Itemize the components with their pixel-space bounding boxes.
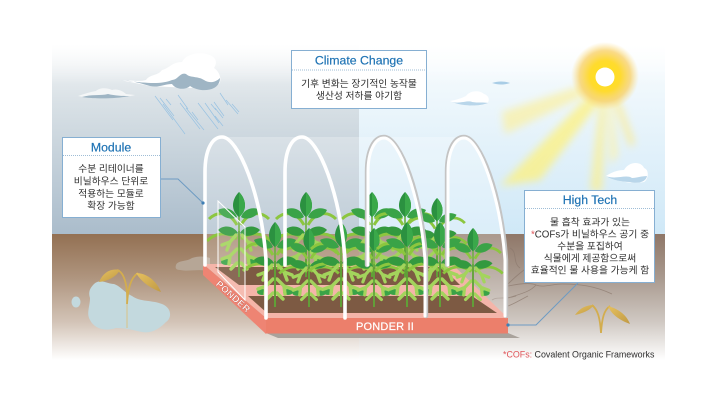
- wilted plant right: [575, 305, 630, 333]
- soil: back bed: [215, 267, 460, 285]
- label: PONDER II: PONDER II: [356, 321, 414, 333]
- main cloud: [120, 53, 220, 88]
- body: 비닐하우스 단위로: [74, 174, 148, 188]
- heading: High Tech: [563, 193, 617, 207]
- body: 확장 가능함: [87, 200, 135, 212]
- body: 기후 변화는 장기적인 농작물: [301, 78, 417, 90]
- sky: sunny right: [359, 45, 665, 235]
- shadow: [266, 333, 520, 338]
- sun with rays: [500, 42, 639, 192]
- body: 물 흡착 효과가 있는: [550, 216, 630, 228]
- heading: Module: [91, 140, 131, 154]
- callout: Module: [62, 138, 160, 218]
- connector: Module: [161, 179, 205, 205]
- bed front: [266, 318, 508, 334]
- ground: right: [359, 234, 665, 360]
- film: [205, 137, 506, 316]
- body: 수분 리테이너를: [78, 163, 144, 175]
- dark cloud with rain: [78, 53, 239, 134]
- heading: Climate Change: [315, 54, 403, 68]
- connector: High Tech: [506, 283, 578, 327]
- callout: Climate Change: [292, 50, 426, 108]
- bed top: [203, 264, 508, 318]
- rain: [155, 93, 239, 134]
- cracks in dry ground: [492, 248, 612, 306]
- sky: rainy left: [52, 45, 359, 235]
- top fade: [52, 44, 665, 84]
- body: 식물에게 제공함으로써: [544, 252, 636, 264]
- end panel frame: [218, 201, 245, 300]
- puddle with wilted plant: [72, 256, 210, 332]
- callout: High Tech: [524, 190, 654, 282]
- grey puddle behind greenhouse: [176, 256, 210, 272]
- body: *COFs가 비닐하우스 공기 중: [531, 230, 649, 240]
- background scene: [52, 44, 665, 360]
- bed side left: [203, 264, 266, 334]
- arches: [205, 137, 506, 318]
- label: PONDER side: PONDER: [213, 279, 252, 315]
- water: [88, 281, 170, 332]
- body: 적용하는 모듈로: [78, 187, 144, 200]
- soil: front bed: [248, 296, 497, 313]
- ground: left: [52, 234, 359, 360]
- small cloud: [78, 88, 135, 98]
- body: 효율적인 물 사용을 가능케 함: [531, 264, 649, 276]
- plants: [207, 192, 503, 307]
- footnote: *COFs: Covalent Organic Frameworks: [503, 350, 655, 360]
- greenhouse: [203, 137, 520, 338]
- light clouds: [450, 82, 648, 183]
- body: 수분을 포집하여: [557, 240, 623, 252]
- body: 생산성 저하를 야기함: [316, 89, 402, 102]
